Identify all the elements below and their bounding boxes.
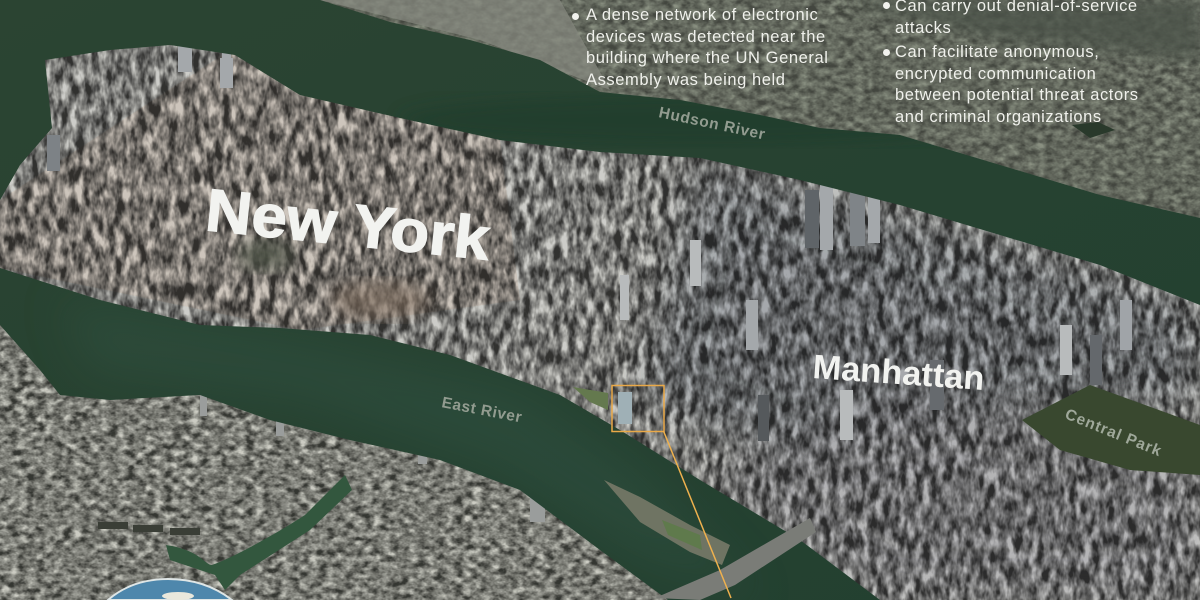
New Jersey shoreline xyxy=(320,0,1200,218)
UN highlight box xyxy=(612,386,664,432)
paragraph: denial of service xyxy=(895,0,1138,37)
Queensboro Bridge xyxy=(655,518,816,600)
text block: UN General Assembly detection xyxy=(572,6,828,89)
bullet: denial of service xyxy=(883,2,890,9)
label: Central Park: Central Park xyxy=(1063,406,1164,460)
paragraph: anonymous communication: and criminal organizations xyxy=(895,108,1102,126)
paragraph: devices was detected near the xyxy=(586,28,826,46)
leader line xyxy=(664,431,731,598)
paragraph: Assembly was being held xyxy=(586,71,786,89)
riverside park xyxy=(573,387,608,410)
label: East River: East River xyxy=(440,394,523,426)
label: Hudson River: Hudson River xyxy=(657,104,766,143)
paragraph xyxy=(586,6,828,89)
paragraph: anonymous communication: Can facilitate anonymous, xyxy=(895,43,1099,61)
paragraph: denial of service: attacks xyxy=(895,19,951,37)
text block: threat capabilities xyxy=(883,0,1139,126)
bullet: anonymous communication xyxy=(883,49,890,56)
paragraph: A dense network of electronic xyxy=(586,6,818,24)
Brooklyn and Queens xyxy=(0,320,700,600)
Newtown Creek xyxy=(166,475,352,590)
paragraph: anonymous communication xyxy=(895,43,1139,126)
Central Park xyxy=(1022,385,1200,475)
globe inset xyxy=(108,579,232,600)
paragraph: anonymous communication: between potential threat actors xyxy=(895,86,1139,104)
paragraph: building where the UN General xyxy=(586,49,828,67)
label: Manhattan: Manhattan xyxy=(811,348,986,398)
dark residential block xyxy=(237,239,293,271)
paragraph: anonymous communication: encrypted communication xyxy=(895,65,1096,83)
midtown towers xyxy=(47,28,1132,441)
bullet xyxy=(572,13,579,20)
Roosevelt Island xyxy=(604,480,730,565)
label: New York: New York xyxy=(203,176,494,273)
